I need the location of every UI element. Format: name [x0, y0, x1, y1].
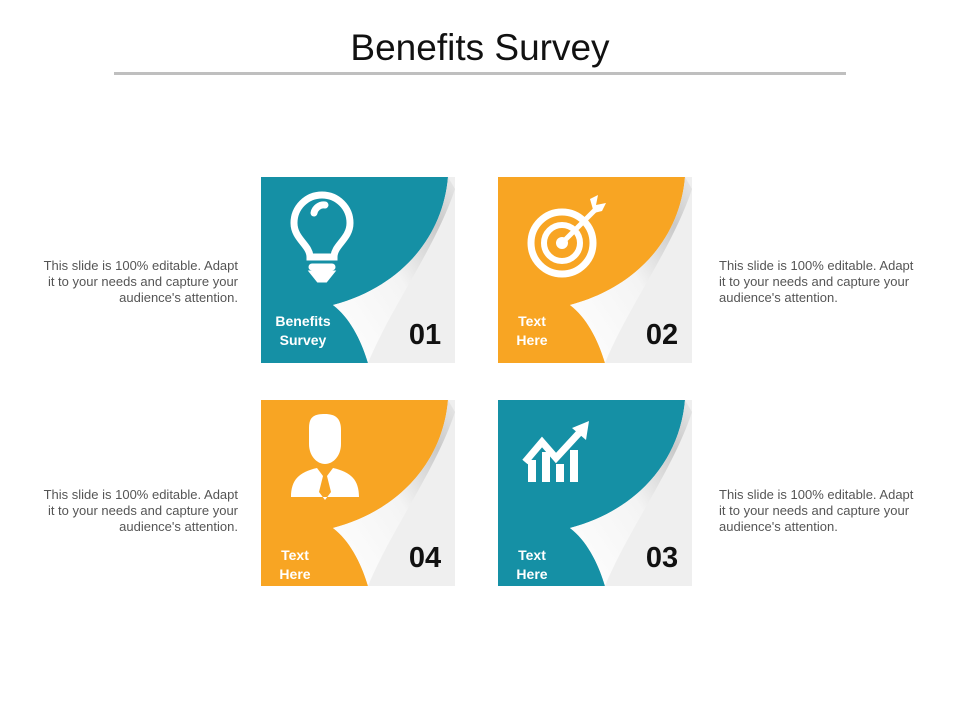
text block: bottom left — [44, 487, 239, 534]
text block: top right: it to your needs and capture your — [719, 274, 910, 289]
label: Text — [518, 313, 546, 329]
number: 01 — [409, 319, 441, 351]
text block: top left — [44, 258, 239, 305]
icon: growth chart — [525, 421, 589, 482]
text block: top left: This slide is 100% editable. Adapt — [44, 258, 238, 273]
title: Benefits Survey — [350, 27, 610, 68]
icon: light bulb — [294, 195, 350, 279]
text block: bottom left: it to your needs and capture your — [48, 503, 239, 518]
text block: bottom right: This slide is 100% editable. Adapt — [719, 487, 914, 502]
label: Text — [518, 547, 546, 563]
card 03 — [498, 400, 692, 586]
text block: top left: audience's attention. — [119, 290, 238, 305]
text block: bottom right: it to your needs and capture your — [719, 503, 910, 518]
card 03: Here — [516, 566, 548, 582]
label: Text — [281, 547, 309, 563]
card 01 — [261, 177, 455, 363]
label: Benefits — [275, 313, 331, 329]
card 04 — [261, 400, 455, 586]
text block: top right: This slide is 100% editable. Adapt — [719, 258, 914, 273]
text block: bottom right: audience's attention. — [719, 519, 838, 534]
icon: target — [531, 195, 606, 274]
number: 04 — [409, 542, 441, 574]
text block: bottom left: audience's attention. — [119, 519, 238, 534]
text block: bottom left: This slide is 100% editable. Adapt — [44, 487, 238, 502]
icon: businessman — [291, 414, 359, 500]
number: 02 — [646, 319, 678, 351]
number: 03 — [646, 542, 678, 574]
card 02: Here — [516, 332, 548, 348]
text block: top left: it to your needs and capture your — [48, 274, 239, 289]
text block: bottom right — [719, 487, 914, 534]
card 02 — [498, 177, 692, 363]
text block: top right: audience's attention. — [719, 290, 838, 305]
card 01: Survey — [280, 332, 327, 348]
card 04: Here — [279, 566, 311, 582]
text block: top right — [719, 258, 914, 305]
